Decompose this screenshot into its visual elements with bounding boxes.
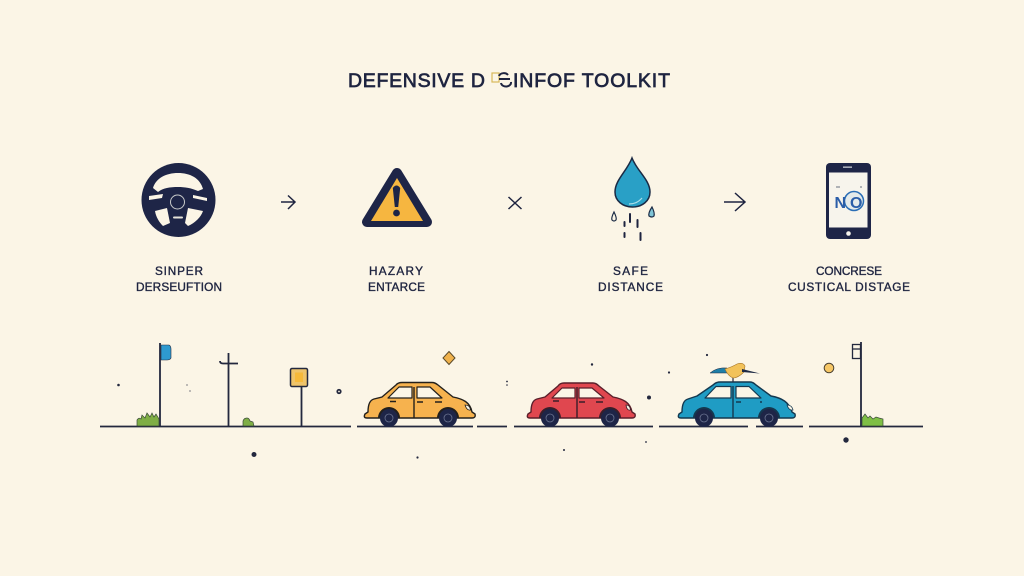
grass left (137, 413, 159, 426)
labels row (136, 264, 910, 294)
title: DEFENSIVE D (348, 70, 485, 92)
label: steering: DERSEUFTION (136, 280, 222, 294)
car: red (527, 383, 635, 427)
yellow sign (290, 368, 308, 426)
road (100, 426, 923, 428)
right sign pole (852, 342, 861, 426)
scattered dots (117, 354, 849, 459)
icon: smartphone: NO (834, 195, 862, 212)
car: blue (678, 382, 795, 427)
flag pole (160, 343, 171, 426)
label: hazard: HAZARY (369, 264, 423, 278)
small bush (243, 418, 254, 426)
cross symbol (508, 197, 522, 209)
label: phone: CUSTICAL DISTAGE (788, 280, 910, 294)
label: phone: CONCRESE (816, 264, 882, 278)
sun circle (824, 363, 834, 373)
label: hazard (368, 264, 425, 294)
label: hazard: ENTARCE (368, 280, 425, 294)
roadside signs and plants (137, 342, 883, 426)
label: safe distance (598, 264, 663, 294)
bird on blue car (710, 363, 760, 382)
arrow 2 (724, 193, 745, 211)
car: yellow (364, 382, 475, 427)
label: phone (788, 264, 910, 294)
grass right (862, 414, 883, 426)
icon: hazard triangle (367, 173, 427, 222)
icon: smartphone (826, 163, 871, 239)
label: safe distance: SAFE (613, 264, 648, 278)
icon: steering wheel (142, 163, 216, 237)
label: steering: SINPER (155, 264, 203, 278)
label: steering (136, 264, 222, 294)
title: INFOF TOOLKIT (513, 70, 670, 92)
arrow 1 (281, 196, 295, 209)
icon: water drop (612, 158, 654, 240)
utility pole (220, 353, 238, 426)
label: safe distance: DISTANCE (598, 280, 663, 294)
diamond marker (443, 352, 455, 364)
title (348, 70, 670, 92)
